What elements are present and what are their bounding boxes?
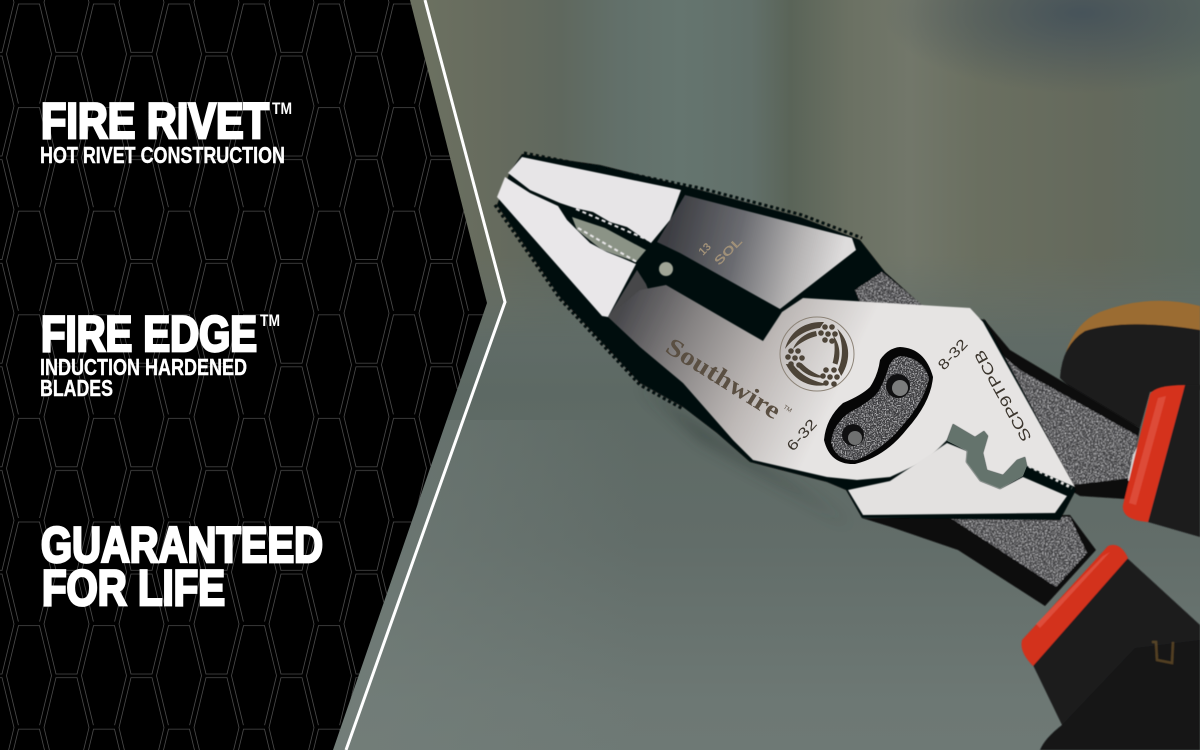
heading: guaranteed for life: GUARANTEED bbox=[41, 517, 323, 573]
soft shadow under pliers bbox=[640, 385, 850, 525]
panel: black hexagon-pattern chevron bbox=[0, 0, 487, 750]
lower jaw dark base bbox=[608, 270, 652, 322]
heading: Fire Edge: TM bbox=[260, 311, 280, 330]
white jaw tips bbox=[497, 157, 1072, 488]
main steel plate bbox=[608, 285, 1075, 487]
black body silhouette of pliers bbox=[495, 153, 1076, 520]
kidney cut-out with screw holes bbox=[824, 347, 933, 464]
engraving: model number: SCP9TPCB bbox=[971, 347, 1035, 444]
gap: jaw opening bbox=[572, 217, 673, 276]
heading: Fire Rivet: TM bbox=[272, 99, 292, 118]
glove: tan cuff and upper finger bbox=[1060, 301, 1200, 428]
text: hot rivet construction: HOT RIVET CONSTRUCTION bbox=[40, 142, 285, 168]
logo: Southwire wire-strand emblem bbox=[780, 317, 861, 398]
heading: guaranteed for life: FOR LIFE bbox=[42, 560, 225, 616]
text: induction hardened blades: INDUCTION HARDENED bbox=[40, 354, 247, 380]
upper jaw steel bbox=[657, 195, 856, 309]
engraving: jaw markings bbox=[697, 234, 745, 268]
engraving: Southwire wordmark: Southwire bbox=[661, 333, 785, 425]
lower crimper plate bbox=[848, 443, 1067, 515]
upper handle bbox=[983, 318, 1200, 537]
heading: Fire Edge: FIRE EDGE bbox=[41, 306, 257, 362]
engraving: jaw markings: SOL bbox=[711, 234, 745, 268]
engraving: 8-32: 8-32 bbox=[935, 336, 971, 374]
engraving: Southwire wordmark: TM bbox=[782, 405, 792, 414]
blurred photo background bbox=[333, 0, 1200, 750]
text: induction hardened blades bbox=[40, 354, 247, 401]
lower handle and grip bbox=[862, 515, 1200, 750]
engraving: jaw markings: 13 bbox=[697, 241, 714, 258]
hook gap in crimper bbox=[947, 424, 1027, 489]
photo: pliers held in gloved hand bbox=[495, 153, 1200, 750]
white chevron line bbox=[346, 0, 505, 750]
heading: Fire Rivet: FIRE RIVET bbox=[41, 93, 269, 149]
text: induction hardened blades: BLADES bbox=[40, 375, 113, 401]
engraving: 6-32: 6-32 bbox=[784, 416, 821, 455]
heading: guaranteed for life bbox=[41, 517, 323, 616]
